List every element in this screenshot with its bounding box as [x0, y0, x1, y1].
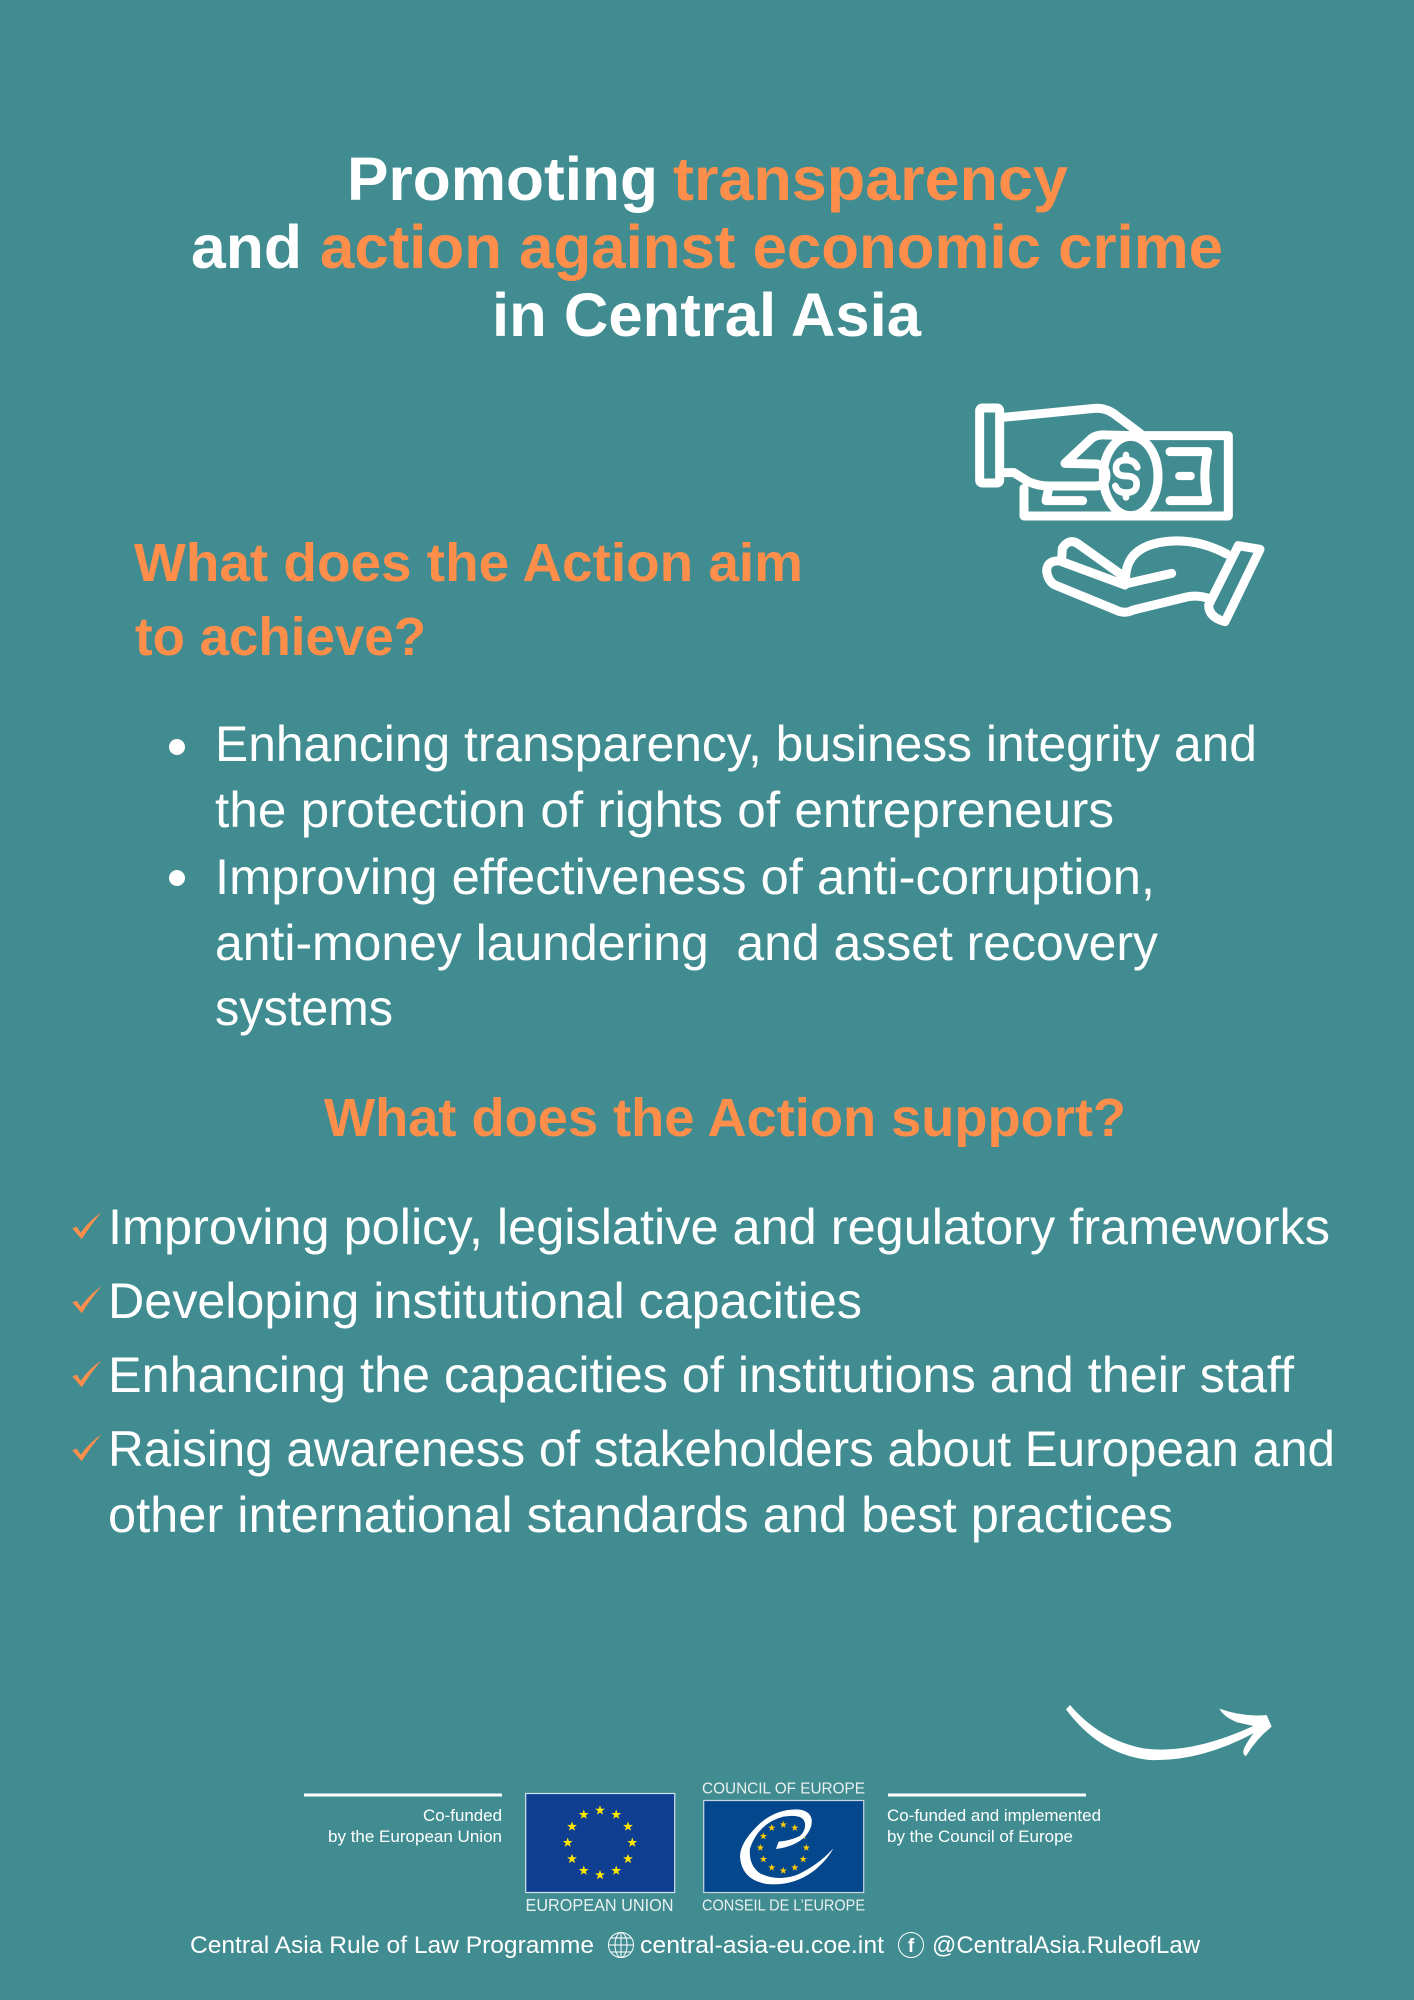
checklist: supports: Raising awareness of stakeholders about European and [108, 1421, 1335, 1477]
title [191, 145, 1223, 349]
footer: programme name and contacts [190, 1932, 1201, 1959]
bullet list: aims: systems [215, 980, 393, 1036]
checklist: supports: Developing institutional capacities [108, 1273, 862, 1329]
icon: hand giving money to open hand [980, 408, 1260, 622]
footer: programme name and contacts: @CentralAsia.RuleofLaw [932, 1932, 1201, 1959]
bullet list: aims: anti-money laundering and asset recovery [215, 915, 1158, 971]
footer: programme name and contacts: f [908, 1936, 915, 1957]
title: action against economic crime [320, 213, 1223, 281]
logo: Council of Europe flag: COUNCIL OF EUROPE [702, 1780, 865, 1797]
title: transparency [673, 145, 1068, 213]
heading: what does the Action aim to achieve: What does the Action aim [134, 533, 803, 593]
title: in Central Asia [492, 281, 922, 349]
heading: what does the Action aim to achieve [134, 533, 803, 667]
heading: what does the Action support: What does the Action support? [324, 1088, 1126, 1148]
logo: European Union flag: EUROPEAN UNION [526, 1895, 674, 1915]
checklist: supports [72, 1199, 1335, 1543]
logo: Council of Europe flag: CONSEIL DE L’EUROPE [702, 1898, 865, 1915]
heading: what does the Action aim to achieve: to achieve? [135, 607, 426, 667]
logo: European Union flag [526, 1794, 675, 1915]
bullet list: aims: Enhancing transparency, business integrity and [215, 716, 1257, 772]
right funding note: Council of Europe: by the Council of Europe [887, 1828, 1073, 1846]
footer: programme name and contacts: central-asia-eu.coe.int [640, 1932, 884, 1959]
checklist: supports: Enhancing the capacities of institutions and their staff [108, 1347, 1294, 1403]
footer: programme name and contacts: Central Asia Rule of Law Programme [190, 1932, 594, 1959]
bullet list: aims: Improving effectiveness of anti-corruption, [215, 849, 1155, 905]
bullet list: aims: the protection of rights of entrepreneurs [215, 782, 1114, 838]
bullet list: aims [169, 716, 1257, 1036]
title: Promoting [347, 145, 658, 213]
logo: Council of Europe flag [702, 1780, 865, 1915]
arrow [1066, 1705, 1272, 1760]
right funding note: Council of Europe: Co-funded and implemented [887, 1807, 1101, 1825]
left funding note: European Union: Co-funded [423, 1807, 502, 1825]
checklist: supports: Improving policy, legislative and regulatory frameworks [108, 1199, 1330, 1255]
checklist: supports: other international standards and best practices [108, 1487, 1173, 1543]
right funding note: Council of Europe [887, 1794, 1101, 1846]
title: and [191, 213, 302, 281]
left funding note: European Union [304, 1794, 502, 1846]
left funding note: European Union: by the European Union [328, 1828, 502, 1846]
